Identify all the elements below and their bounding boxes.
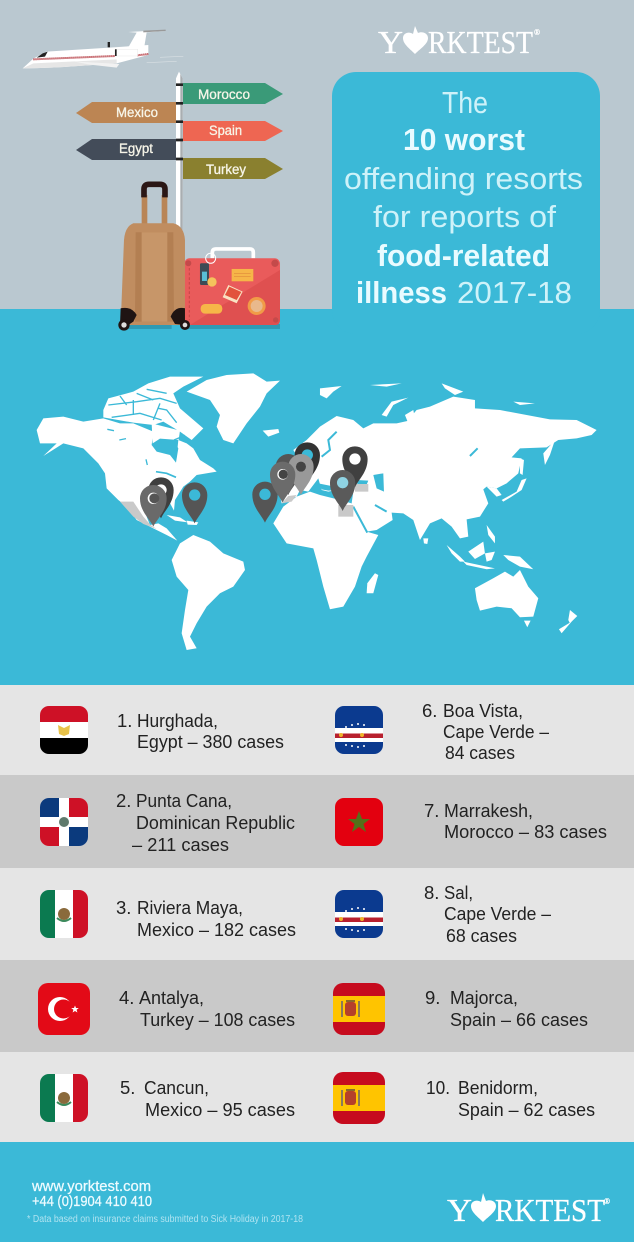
row text: 6 Boa Vista: 84 cases bbox=[445, 742, 515, 763]
title text: The bbox=[442, 85, 488, 120]
sign: Mexico bbox=[76, 102, 176, 123]
world map bbox=[37, 373, 597, 650]
flag: Mexico bbox=[40, 1074, 88, 1122]
map pin: Spain light bbox=[288, 454, 314, 495]
flag: Morocco bbox=[335, 798, 383, 846]
row text: 8 Sal bbox=[424, 882, 552, 946]
row text: 2 Punta Cana: Punta Cana, bbox=[136, 790, 232, 811]
footer contact text: * Data based on insurance claims submitted to Sick Holiday in 2017-18 bbox=[27, 1214, 303, 1225]
flag: Spain bbox=[333, 983, 385, 1035]
logo: top: ® bbox=[534, 28, 540, 37]
Canadian Arctic islands bbox=[103, 377, 203, 443]
title text bbox=[344, 85, 583, 310]
illustration: airplane bbox=[23, 30, 183, 68]
row text: 2 Punta Cana bbox=[116, 790, 295, 855]
row text: 5 Cancun bbox=[120, 1077, 295, 1120]
map pin: Punta Cana bbox=[182, 482, 207, 523]
title panel bbox=[332, 72, 600, 334]
map pin: Spain back bbox=[276, 454, 301, 495]
sign: Mexico: Mexico bbox=[116, 105, 158, 120]
row text: 7 Marrakesh: Morocco – 83 cases bbox=[444, 821, 607, 842]
row text: 9 Majorca: Majorca, bbox=[450, 987, 518, 1008]
sign: Morocco: Morocco bbox=[198, 87, 250, 102]
title text: 10 worst bbox=[403, 122, 525, 157]
row text: 1 Hurghada bbox=[117, 710, 284, 752]
signpost bbox=[76, 72, 283, 233]
map pin: Riviera Maya bbox=[140, 485, 167, 527]
row text: 2 Punta Cana: – 211 cases bbox=[132, 834, 229, 855]
row text: 8 Sal: 8. bbox=[424, 882, 439, 903]
Southeast Asia and Indonesia bbox=[423, 525, 533, 569]
flag: Egypt bbox=[40, 706, 88, 754]
sign: Egypt bbox=[76, 139, 176, 160]
Mexico highlight bbox=[120, 502, 157, 529]
Iceland bbox=[263, 429, 279, 437]
logo: footer: ® bbox=[604, 1197, 610, 1206]
row text: 6 Boa Vista: 6. bbox=[422, 700, 437, 721]
row text: 6 Boa Vista: Boa Vista, bbox=[443, 700, 523, 721]
logo: footer bbox=[447, 1192, 610, 1228]
flag: Spain bbox=[333, 1072, 385, 1124]
title text: food-related bbox=[377, 238, 550, 273]
title text: illness bbox=[356, 275, 447, 310]
row text: 9 Majorca: 9. bbox=[425, 987, 440, 1008]
row text: 6 Boa Vista: Cape Verde – bbox=[443, 721, 550, 742]
sign: Turkey: Turkey bbox=[206, 162, 246, 177]
row text: 10 Benidorm: Spain – 62 cases bbox=[458, 1099, 595, 1120]
Turkey highlight bbox=[355, 484, 368, 492]
row text: 2 Punta Cana: Dominican Republic bbox=[136, 812, 295, 833]
South America bbox=[172, 535, 245, 650]
footer panel bbox=[0, 1142, 634, 1242]
Egypt highlight bbox=[338, 505, 353, 517]
row text: 9 Majorca bbox=[425, 987, 588, 1030]
logo: footer: Y bbox=[447, 1192, 472, 1228]
North America bbox=[37, 417, 217, 541]
header background bbox=[0, 0, 634, 310]
Hudson Bay and lakes bbox=[152, 439, 178, 463]
row text: 8 Sal: Cape Verde – bbox=[444, 903, 552, 924]
row text: 7 Marrakesh bbox=[424, 800, 607, 842]
Madagascar bbox=[367, 573, 378, 593]
illustration: red suitcase bbox=[184, 249, 280, 329]
Caribbean islands bbox=[167, 515, 198, 525]
flag: Turkey bbox=[38, 983, 90, 1035]
row text: 5 Cancun: Cancun, bbox=[144, 1077, 209, 1098]
Eurasia bbox=[280, 397, 597, 540]
row text: 4 Antalya: 4. bbox=[119, 987, 134, 1008]
footer contact text: +44 (0)1904 410 410 bbox=[32, 1193, 152, 1210]
row text: 3 Riviera Maya: Riviera Maya, bbox=[137, 897, 243, 918]
row text: 7 Marrakesh: Marrakesh, bbox=[444, 800, 533, 821]
map panel background bbox=[0, 309, 634, 685]
footer contact text bbox=[27, 1178, 303, 1225]
sign: Egypt: Egypt bbox=[119, 141, 153, 156]
illustration: brown suitcase bbox=[118, 184, 190, 331]
logo: footer: RKTEST bbox=[495, 1192, 605, 1228]
row text: 10 Benidorm bbox=[426, 1077, 595, 1120]
row text: 3 Riviera Maya: 3. bbox=[116, 897, 131, 918]
row text: 3 Riviera Maya bbox=[116, 897, 296, 940]
logo: top: RKTEST bbox=[428, 24, 533, 60]
title text: offending resorts bbox=[344, 161, 583, 196]
flag: Mexico bbox=[40, 890, 88, 938]
map pin: Spain front bbox=[270, 462, 295, 503]
row text: 6 Boa Vista bbox=[422, 700, 550, 763]
footer contact text: www.yorktest.com bbox=[31, 1178, 151, 1195]
row text: 5 Cancun: 5. bbox=[120, 1077, 135, 1098]
map pin: Egypt bbox=[330, 470, 355, 511]
row text: 1 Hurghada: 1. bbox=[117, 710, 132, 731]
row text: 4 Antalya bbox=[119, 987, 295, 1030]
Arctic islands and Japan bbox=[320, 383, 535, 427]
row text: 5 Cancun: Mexico – 95 cases bbox=[145, 1099, 295, 1120]
sign: Spain: Spain bbox=[209, 123, 242, 138]
title text: for reports of bbox=[373, 199, 556, 234]
row text: 1 Hurghada: Egypt – 380 cases bbox=[137, 731, 284, 752]
Greenland bbox=[187, 373, 280, 443]
flag: Cape Verde bbox=[335, 706, 383, 754]
map pin: Cancun bbox=[148, 477, 174, 518]
flag: Cape Verde bbox=[335, 890, 383, 938]
row text: 8 Sal: Sal, bbox=[444, 882, 473, 903]
sign: Morocco bbox=[183, 83, 283, 104]
Australia bbox=[475, 570, 538, 627]
ranking rows background bbox=[0, 685, 634, 1142]
row text: 10 Benidorm: Benidorm, bbox=[458, 1077, 538, 1098]
row text: 9 Majorca: Spain – 66 cases bbox=[450, 1009, 588, 1030]
New Zealand bbox=[559, 610, 577, 633]
row text: 7 Marrakesh: 7. bbox=[424, 800, 439, 821]
row text: 10 Benidorm: 10. bbox=[426, 1077, 450, 1098]
sign: Spain bbox=[183, 121, 283, 141]
Africa bbox=[273, 492, 378, 609]
logo: top bbox=[378, 24, 540, 60]
sign: Turkey bbox=[183, 158, 283, 179]
inland seas bbox=[322, 432, 478, 533]
row text: 4 Antalya: Antalya, bbox=[139, 987, 204, 1008]
title text: 2017-18 bbox=[457, 275, 572, 310]
pole bbox=[176, 72, 183, 233]
map pin: Turkey bbox=[342, 446, 368, 487]
Spain highlight bbox=[282, 495, 297, 503]
row text: 3 Riviera Maya: Mexico – 182 cases bbox=[137, 919, 296, 940]
logo: top: Y bbox=[378, 24, 403, 60]
row text: 4 Antalya: Turkey – 108 cases bbox=[140, 1009, 295, 1030]
row text: 2 Punta Cana: 2. bbox=[116, 790, 131, 811]
map pin: Canary Islands bbox=[252, 482, 278, 523]
flag: Dominican Republic bbox=[40, 798, 88, 846]
row text: 8 Sal: 68 cases bbox=[446, 925, 517, 946]
map pin: Balearic dark bbox=[295, 442, 320, 483]
row text: 1 Hurghada: Hurghada, bbox=[137, 710, 218, 731]
